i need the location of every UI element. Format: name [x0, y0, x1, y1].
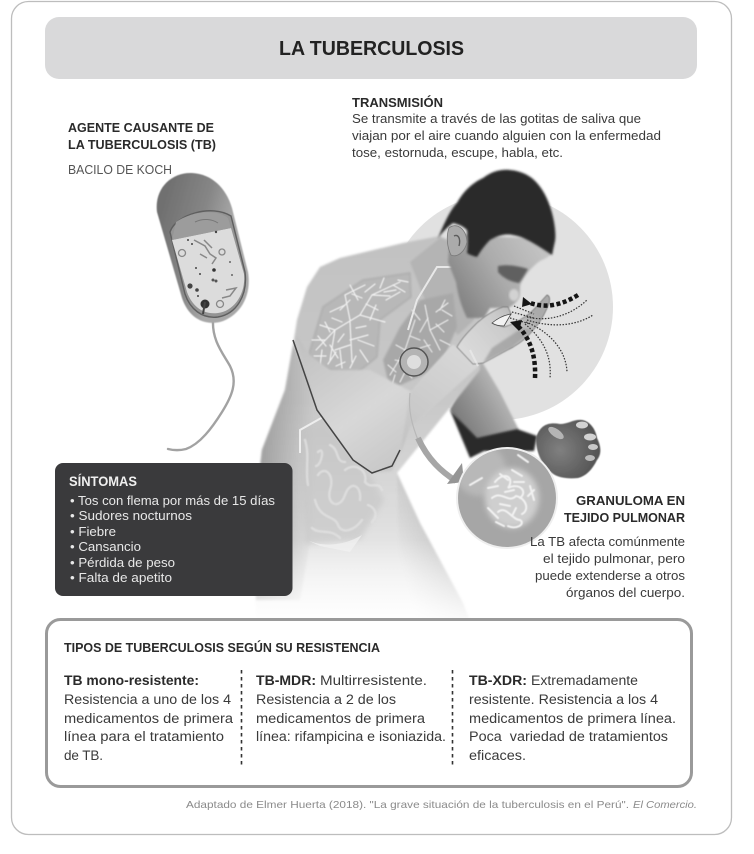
symptom list: • Cansancio [70, 540, 141, 554]
text block: granuloma: órganos del cuerpo. [566, 586, 685, 600]
source note: Adaptado de Elmer Huerta (2018). "La grave situación de la tuberculosis en el Perú". [186, 799, 629, 811]
column: MDR: Multirresistente. [320, 673, 427, 688]
column: MDR: línea: rifampicina e isoniazida. [256, 729, 446, 744]
illustration: Koch bacillus [157, 173, 249, 450]
text block: granuloma [530, 493, 686, 600]
text block: causal agent: AGENTE CAUSANTE DE [68, 120, 214, 135]
column: mono-resistant: de TB. [64, 748, 103, 763]
hair [438, 170, 555, 257]
column: MDR [256, 673, 446, 744]
column: XDR [469, 673, 676, 763]
magnifier circle on lung [400, 348, 428, 376]
column: MDR: medicamentos de primera [256, 711, 426, 726]
panel: resistance types [46, 620, 692, 786]
title: LA TUBERCULOSIS [279, 38, 464, 60]
text block: causal agent [68, 120, 216, 177]
text block: granuloma: puede extenderse a otros [535, 569, 685, 583]
symptom list: • Falta de apetito [70, 571, 172, 585]
column: mono-resistant: medicamentos de primera [64, 711, 234, 726]
panel heading: TIPOS DE TUBERCULOSIS SEGÚN SU RESISTENCIA [64, 640, 381, 655]
neck [410, 238, 474, 335]
column: XDR: TB-XDR: [469, 673, 527, 688]
droplet arrows [510, 295, 593, 378]
rear hand [536, 420, 600, 478]
torso [254, 236, 480, 655]
text block: transmission: TRANSMISIÓN [352, 95, 443, 110]
text block: transmission: Se transmite a través de las gotitas de saliva que [352, 112, 641, 126]
text block: transmission: viajan por el aire cuando alguien con la enfermedad [352, 129, 661, 143]
column: XDR: eficaces. [469, 748, 526, 763]
title banner [45, 17, 697, 79]
text block: transmission [352, 95, 661, 160]
column: mono-resistant [64, 673, 234, 763]
text block: transmission: tose, estornuda, escupe, habla, etc. [352, 146, 563, 160]
column: MDR: Resistencia a 2 de los [256, 692, 396, 707]
column: mono-resistant: TB mono-resistente: [64, 673, 199, 688]
rear forearm and sleeve [450, 355, 537, 458]
text block: causal agent: LA TUBERCULOSIS (TB) [68, 137, 216, 152]
column: MDR: TB-MDR: [256, 673, 316, 688]
heading: symptoms: SÍNTOMAS [69, 474, 137, 489]
text block: granuloma: GRANULOMA EN [576, 493, 685, 508]
ear [447, 226, 467, 256]
intestines [300, 417, 384, 552]
column: mono-resistant: Resistencia a uno de los 4 [64, 692, 232, 707]
nose highlight [509, 289, 519, 301]
column: XDR: Extremadamente [531, 673, 638, 688]
curved arrow to granuloma [418, 438, 456, 481]
lower fade [240, 540, 490, 660]
column: XDR: Poca variedad de tratamientos [469, 729, 668, 744]
lung: right lobe [383, 267, 457, 390]
column: XDR: medicamentos de primera línea. [469, 711, 676, 726]
eye shadow [498, 265, 528, 283]
text block: granuloma: TEJIDO PULMONAR [564, 510, 686, 525]
column: mono-resistant: línea para el tratamiento [64, 729, 224, 744]
symptom list: • Sudores nocturnos [70, 509, 192, 523]
granuloma circle [454, 444, 558, 549]
text block: granuloma: el tejido pulmonar, pero [543, 552, 685, 566]
panel: symptoms [55, 463, 292, 596]
illustration: grey circle behind head [387, 194, 613, 420]
lung: left lobe [308, 273, 411, 373]
symptom list [70, 494, 275, 585]
back shading [254, 345, 330, 600]
bent front arm [293, 335, 478, 473]
text block: causal agent: BACILO DE KOCH [68, 163, 172, 177]
head [438, 170, 555, 318]
illustration: coughing man [255, 168, 602, 612]
source note: El Comercio. [633, 799, 697, 811]
column: XDR: resistente. Resistencia a los 4 [469, 692, 659, 707]
text block: granuloma: La TB afecta comúnmente [530, 535, 685, 549]
front hand [457, 295, 550, 366]
symptom list: • Fiebre [70, 525, 116, 539]
symptom list: • Tos con flema por más de 15 días [70, 494, 275, 508]
symptom list: • Pérdida de peso [70, 556, 175, 570]
